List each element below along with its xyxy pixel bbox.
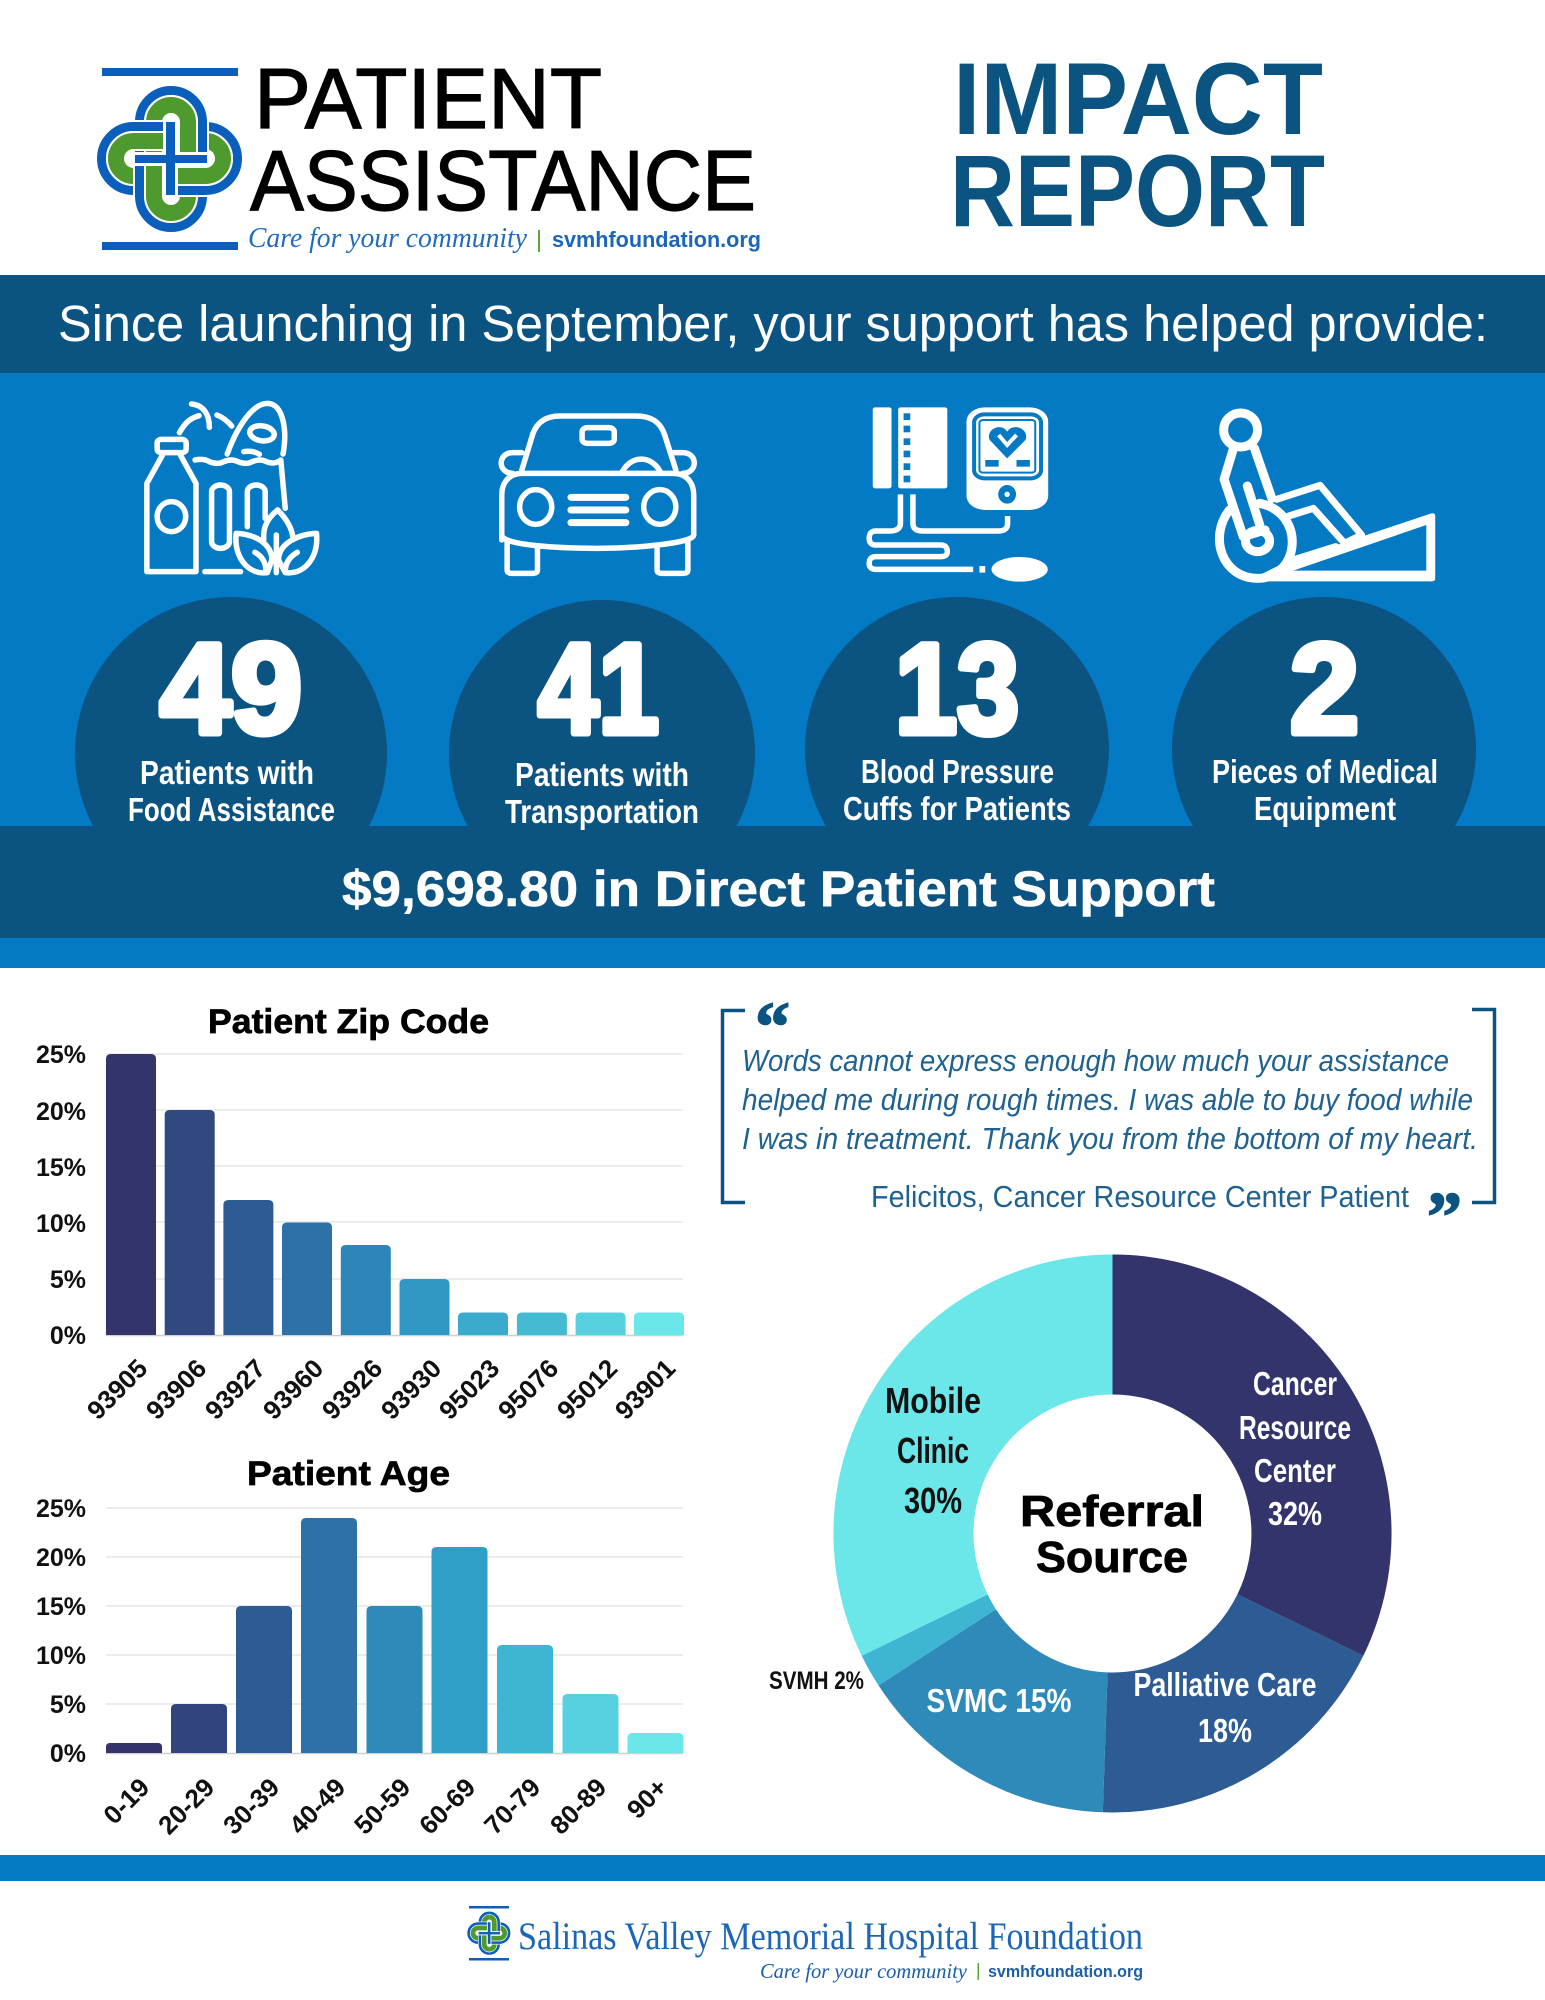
y axis labels: 0% xyxy=(50,1740,86,1768)
footer band xyxy=(0,1855,1545,1881)
logo url: svmhfoundation.org xyxy=(552,227,761,252)
logo bars xyxy=(469,1906,509,1960)
label: food assistance: Food Assistance xyxy=(128,791,335,828)
stat circle: 13 blood pressure cuffs xyxy=(805,597,1109,901)
quote text: helped me during rough times. I was able to buy food while xyxy=(742,1082,1473,1117)
x axis labels: 50-59 xyxy=(348,1772,416,1840)
label: medical equipment: Equipment xyxy=(1254,790,1396,827)
bar chart: patient zip code xyxy=(36,1003,684,1425)
center label xyxy=(1020,1487,1204,1582)
quote text xyxy=(742,1043,1478,1156)
label: food assistance: Patients with xyxy=(140,754,314,791)
label: medical equipment xyxy=(1212,753,1438,827)
segment: svmc xyxy=(878,1609,1108,1812)
stat circle: 2 medical equipment: 2 xyxy=(1290,618,1359,761)
label: cancer resource center: 32% xyxy=(1268,1495,1322,1532)
opening quote mark: “ xyxy=(755,989,790,1066)
icon: blood pressure cuff xyxy=(869,407,1048,582)
callout: patient quote xyxy=(722,989,1494,1256)
label: blood pressure cuffs xyxy=(843,753,1071,827)
x axis labels: 60-69 xyxy=(413,1772,481,1840)
label: cancer resource center: Cancer xyxy=(1253,1365,1337,1402)
attribution: Felicitos, Cancer Resource Center Patient xyxy=(871,1179,1409,1214)
y axis labels: 15% xyxy=(36,1593,86,1621)
label: transportation xyxy=(505,756,699,830)
segment: mobile clinic xyxy=(833,1254,1112,1656)
logo word PATIENT: PATIENT xyxy=(254,52,602,147)
center label: Source xyxy=(1036,1533,1188,1582)
quote text: I was in treatment. Thank you from the bottom of my heart. xyxy=(742,1121,1478,1156)
x axis labels: 93905 xyxy=(81,1353,153,1425)
x axis labels: 95012 xyxy=(551,1353,623,1425)
label: palliative care: Palliative Care xyxy=(1134,1666,1316,1703)
segment: svmh xyxy=(862,1594,996,1685)
y axis labels: 10% xyxy=(36,1642,86,1670)
y axis labels: 20% xyxy=(36,1544,86,1572)
footer tagline: Care for your community xyxy=(760,1959,968,1983)
brackets xyxy=(722,1010,1494,1202)
x axis labels: 93927 xyxy=(199,1353,271,1425)
label: mobile clinic: Mobile xyxy=(885,1380,981,1421)
footer logo: foundation xyxy=(469,1906,1143,1983)
y axis labels xyxy=(36,1495,86,1768)
banner: since launching xyxy=(0,275,1545,373)
y axis labels xyxy=(36,1041,86,1350)
x axis labels: 20-29 xyxy=(152,1772,220,1840)
stat circle: 2 medical equipment xyxy=(1172,597,1476,901)
panel: impact band background xyxy=(0,373,1545,968)
segment: cancer resource center xyxy=(1112,1254,1392,1656)
label: svmh: SVMH 2% xyxy=(769,1667,864,1695)
label: blood pressure cuffs: Cuffs for Patients xyxy=(843,790,1071,827)
x axis labels: 30-39 xyxy=(217,1772,285,1840)
label: transportation: Transportation xyxy=(505,793,699,830)
bars xyxy=(106,1054,684,1335)
header logo: Patient Assistance xyxy=(102,52,761,254)
label: blood pressure cuffs: Blood Pressure xyxy=(861,753,1054,790)
icon: small knot xyxy=(469,1913,509,1954)
logo tagline: Care for your community xyxy=(248,222,527,254)
x axis labels: 40-49 xyxy=(283,1772,351,1840)
x axis labels xyxy=(97,1772,673,1840)
band: direct patient support: $9,698.80 in Direct Patient Support xyxy=(342,861,1215,917)
footer url: svmhfoundation.org xyxy=(988,1962,1143,1981)
segment: palliative care xyxy=(1103,1594,1363,1812)
label: food assistance xyxy=(128,754,335,828)
x axis labels xyxy=(81,1353,681,1425)
label: mobile clinic xyxy=(885,1380,981,1521)
x axis labels: 90+ xyxy=(621,1772,673,1824)
label: transportation: Patients with xyxy=(515,756,689,793)
title: Impact Report xyxy=(950,42,1325,248)
icon: interlaced cross knot xyxy=(102,90,238,228)
label: palliative care xyxy=(1134,1666,1316,1749)
y axis labels: 10% xyxy=(36,1210,86,1238)
y axis labels: 5% xyxy=(50,1691,86,1719)
donut chart: referral source xyxy=(769,1254,1392,1812)
logo word ASSISTANCE: ASSISTANCE xyxy=(250,134,756,229)
x axis labels: 95023 xyxy=(433,1353,505,1425)
chart title: Patient Zip Code xyxy=(208,1003,489,1041)
bar chart: patient age xyxy=(36,1455,684,1840)
icon: car xyxy=(501,416,694,573)
quote text: Words cannot express enough how much your assistance xyxy=(742,1043,1449,1078)
y axis labels: 15% xyxy=(36,1154,86,1182)
label: mobile clinic: Clinic xyxy=(897,1430,969,1471)
band: direct patient support xyxy=(0,826,1545,938)
logo bars xyxy=(102,68,238,250)
x axis labels: 93901 xyxy=(609,1353,681,1425)
label: cancer resource center: Resource xyxy=(1239,1409,1351,1446)
label: mobile clinic: 30% xyxy=(904,1480,962,1521)
stat circle: 49 food assistance xyxy=(75,597,387,909)
title: Impact Report: REPORT xyxy=(950,134,1325,248)
center label: Referral xyxy=(1020,1487,1204,1536)
title: Impact Report: IMPACT xyxy=(953,42,1323,156)
label: cancer resource center xyxy=(1239,1365,1351,1532)
y axis labels: 20% xyxy=(36,1098,86,1126)
stat circle: 41 transportation: 41 xyxy=(538,618,659,761)
x axis labels: 0-19 xyxy=(97,1772,155,1830)
icon: wheelchair ramp equipment xyxy=(1219,413,1435,581)
closing quote mark: ” xyxy=(1427,1179,1462,1256)
y axis labels: 0% xyxy=(50,1322,86,1350)
icon: groceries xyxy=(147,403,317,573)
stat circle: 41 transportation xyxy=(449,600,755,906)
x axis labels: 80-89 xyxy=(544,1772,612,1840)
label: svmc: SVMC 15% xyxy=(926,1682,1072,1719)
x axis labels: 70-79 xyxy=(478,1772,546,1840)
bars xyxy=(106,1518,684,1753)
x axis labels: 93906 xyxy=(140,1353,212,1425)
x axis labels: 93930 xyxy=(375,1353,447,1425)
label: medical equipment: Pieces of Medical xyxy=(1212,753,1438,790)
label: palliative care: 18% xyxy=(1198,1712,1252,1749)
x axis labels: 95076 xyxy=(492,1353,564,1425)
y axis labels: 25% xyxy=(36,1495,86,1523)
chart title: Patient Age xyxy=(247,1455,450,1493)
banner: since launching: Since launching in September, your support has helped provide: xyxy=(58,295,1488,352)
stat circle: 13 blood pressure cuffs: 13 xyxy=(895,618,1019,761)
foundation name: Salinas Valley Memorial Hospital Foundation xyxy=(518,1915,1143,1958)
y axis labels: 25% xyxy=(36,1041,86,1069)
x axis labels: 93926 xyxy=(316,1353,388,1425)
stat circle: 49 food assistance: 49 xyxy=(160,618,302,761)
y axis labels: 5% xyxy=(50,1266,86,1294)
label: cancer resource center: Center xyxy=(1254,1452,1336,1489)
x axis labels: 93960 xyxy=(257,1353,329,1425)
